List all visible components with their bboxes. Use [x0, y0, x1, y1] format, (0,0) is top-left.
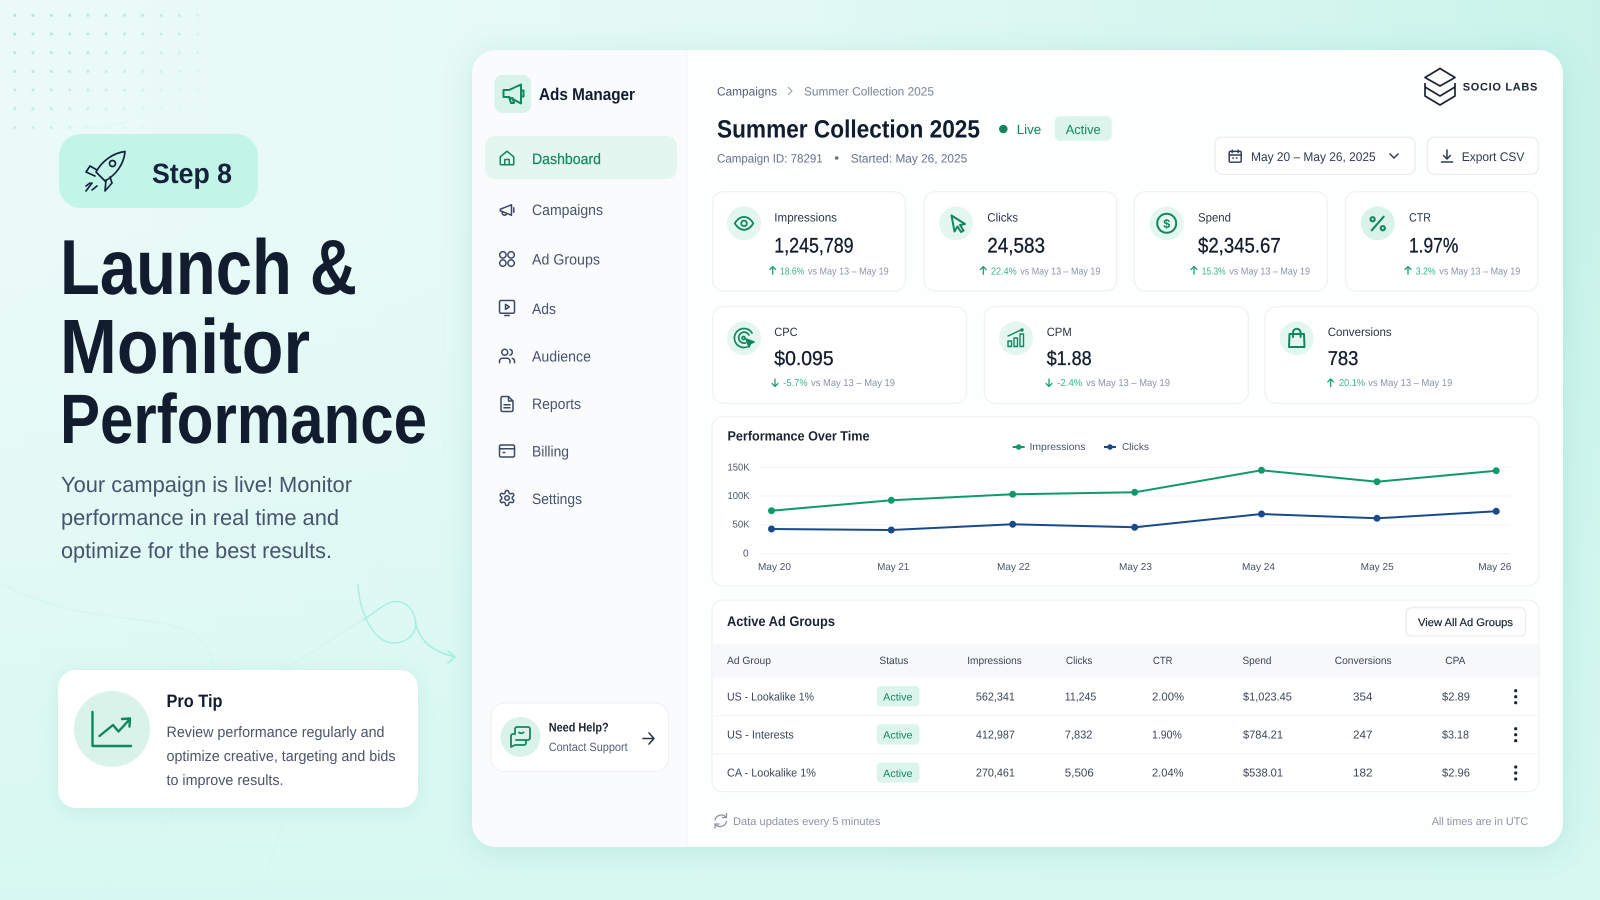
- step badge: [59, 134, 258, 208]
- row: us lookalike: 562,341: [976, 692, 1015, 704]
- help card: Contact Support: [549, 740, 628, 754]
- table header row: Conversions: [1335, 655, 1392, 667]
- nav: billing: Billing: [532, 444, 569, 460]
- table header row: [713, 644, 1538, 678]
- kpi: cpm: CPM: [1047, 325, 1072, 339]
- y axis labels: [728, 462, 750, 560]
- intro paragraph: performance in real time and: [61, 505, 339, 530]
- y axis labels: 150K: [728, 462, 750, 473]
- kpi: cpc: $0.095: [774, 348, 834, 370]
- row: ca lookalike: 2.04%: [1152, 768, 1184, 780]
- kpi: spend: $: [1163, 217, 1170, 231]
- table header row: CPA: [1445, 655, 1465, 667]
- icon: rising chart: [92, 712, 131, 746]
- kpi: conversions: [1265, 307, 1538, 403]
- pro tip text: Review performance regularly and: [166, 724, 384, 741]
- export button: Export CSV: [1462, 150, 1525, 164]
- row: us lookalike: 2.00%: [1152, 692, 1184, 704]
- line: impressions: [768, 467, 1500, 514]
- kpi: ctr: vs May 13 – May 19: [1439, 266, 1521, 277]
- row: us interests: 247: [1353, 730, 1372, 742]
- nav: ads: Ads: [532, 301, 556, 318]
- icon: decorative swirl arrow: [358, 585, 455, 663]
- icon: arrow: [643, 733, 654, 744]
- breadcrumb: Campaigns: [717, 84, 777, 98]
- icon: chat bubbles: [511, 727, 530, 747]
- row: us lookalike: 11,245: [1065, 692, 1096, 704]
- nav: campaigns: Campaigns: [532, 202, 603, 219]
- icon: megaphone logo: [504, 84, 524, 104]
- kpi: ctr: 1.97%: [1409, 234, 1458, 257]
- help card: Need Help?: [549, 721, 609, 735]
- x axis labels: [758, 562, 1512, 573]
- kpi: cpc: -5.7%: [783, 378, 808, 389]
- chart legend: Impressions: [1030, 442, 1086, 453]
- footer notes: [715, 814, 1528, 828]
- breadcrumb: Summer Collection 2025: [804, 84, 934, 98]
- campaign header: [717, 115, 1112, 165]
- row: us interests: 1.90%: [1152, 730, 1182, 742]
- pro tip heading: Pro Tip: [166, 691, 222, 711]
- intro paragraph: optimize for the best results.: [61, 538, 332, 563]
- y axis labels: 50K: [732, 520, 750, 531]
- view all button: View All Ad Groups: [1418, 617, 1513, 629]
- chart legend: Clicks: [1122, 442, 1149, 453]
- breadcrumb: [717, 84, 934, 98]
- intro paragraph: [61, 472, 352, 563]
- row: us interests: 7,832: [1065, 730, 1092, 742]
- title: Launch &: [60, 223, 357, 311]
- campaign header: Active: [1066, 122, 1101, 137]
- row: us interests: [727, 724, 1517, 745]
- x axis labels: May 22: [997, 562, 1030, 573]
- kpi: cpm: -2.4%: [1057, 378, 1082, 389]
- kpi: impressions: Impressions: [774, 211, 837, 225]
- row: ca lookalike: Active: [883, 768, 913, 780]
- campaign header: Live: [1017, 122, 1041, 137]
- footer notes: Data updates every 5 minutes: [733, 816, 881, 828]
- kpi: conversions: Conversions: [1328, 325, 1392, 339]
- row: ca lookalike: 182: [1353, 768, 1372, 780]
- campaign header: Campaign ID: 78291: [717, 151, 823, 165]
- nav: audience: [500, 348, 591, 366]
- chart legend: [1013, 442, 1149, 453]
- row: us lookalike: $1,023.45: [1243, 692, 1292, 704]
- kpi: clicks: 22.4%: [991, 266, 1017, 277]
- kpi: conversions: 783: [1328, 348, 1358, 370]
- nav: reports: [501, 396, 581, 413]
- table header row: Clicks: [1066, 655, 1092, 667]
- row: us interests: US - Interests: [727, 730, 794, 742]
- kpi: impressions: vs May 13 – May 19: [808, 266, 889, 277]
- x axis labels: May 21: [877, 562, 910, 573]
- kpi: ctr: CTR: [1409, 211, 1431, 225]
- campaign header: Started: May 26, 2025: [851, 151, 968, 165]
- date range button: May 20 – May 26, 2025: [1251, 150, 1376, 164]
- row: us interests: $3.18: [1442, 730, 1469, 742]
- help card: [491, 703, 668, 772]
- nav: ads: [500, 300, 556, 318]
- kpi: spend: [1134, 192, 1327, 291]
- export button: [1427, 137, 1538, 174]
- row: ca lookalike: 270,461: [976, 768, 1015, 780]
- x axis labels: May 23: [1119, 562, 1152, 573]
- y axis labels: 100K: [728, 491, 750, 502]
- x axis labels: May 24: [1242, 562, 1275, 573]
- kpi: cpm: [984, 307, 1248, 403]
- row: us interests: Active: [883, 730, 913, 742]
- title: [60, 223, 427, 458]
- line: clicks: [768, 508, 1500, 534]
- pro tip text: [166, 724, 396, 789]
- panel: sidebar: [472, 50, 687, 847]
- table header row: Status: [879, 655, 908, 667]
- panel: dashboard window: [472, 50, 1563, 847]
- row: us lookalike: 354: [1353, 692, 1373, 704]
- kpi: spend: $2,345.67: [1198, 234, 1281, 257]
- kpi: ctr: [1345, 192, 1538, 291]
- row: us interests: 412,987: [976, 730, 1015, 742]
- row: ca lookalike: [727, 762, 1517, 783]
- table header row: CTR: [1153, 655, 1173, 667]
- brand logo: socio labs: SOCIO LABS: [1463, 82, 1537, 94]
- row: us lookalike: US - Lookalike 1%: [727, 692, 814, 704]
- kpi: spend: 15.3%: [1202, 266, 1226, 277]
- footer notes: All times are in UTC: [1432, 816, 1528, 828]
- table header row: Spend: [1242, 655, 1272, 667]
- table heading: Active Ad Groups: [727, 613, 835, 629]
- step label: Step 8: [152, 158, 232, 189]
- kpi: clicks: Clicks: [987, 211, 1018, 225]
- nav: campaigns: [500, 202, 603, 219]
- panel: active ad groups table: [712, 600, 1539, 792]
- title: Performance: [60, 380, 427, 458]
- kpi: impressions: 1,245,789: [774, 234, 854, 257]
- kpi: conversions: vs May 13 – May 19: [1368, 378, 1453, 389]
- kpi: cpc: [713, 307, 967, 403]
- panel: performance chart: [712, 417, 1539, 586]
- icon: rocket: [86, 152, 125, 191]
- nav: settings: Settings: [532, 491, 582, 508]
- kpi: spend: vs May 13 – May 19: [1229, 266, 1310, 277]
- panel: pro tip: [58, 670, 418, 808]
- nav: ad groups: Ad Groups: [532, 252, 600, 268]
- row: ca lookalike: $538.01: [1243, 768, 1283, 780]
- pro tip text: optimize creative, targeting and bids: [166, 748, 396, 765]
- row: ca lookalike: $2.96: [1442, 768, 1470, 780]
- chart heading: Performance Over Time: [728, 429, 870, 444]
- kpi: cpc: CPC: [774, 325, 798, 339]
- x axis labels: May 26: [1478, 562, 1512, 573]
- kpi: cpc: vs May 13 – May 19: [811, 378, 895, 389]
- nav: billing: [500, 444, 569, 460]
- kpi: ctr: 3.2%: [1416, 266, 1436, 277]
- nav: active dashboard: Dashboard: [532, 151, 601, 168]
- y axis labels: 0: [743, 549, 749, 560]
- nav: active dashboard: [485, 136, 677, 179]
- campaign header: Summer Collection 2025: [717, 115, 980, 143]
- app name: Ads Manager: [539, 85, 635, 104]
- table header row: Impressions: [967, 655, 1022, 667]
- x axis labels: May 25: [1361, 562, 1394, 573]
- kpi: impressions: [713, 192, 905, 291]
- brand logo: socio labs: [1425, 68, 1537, 105]
- kpi: conversions: 20.1%: [1339, 378, 1365, 389]
- kpi: clicks: [924, 192, 1117, 291]
- x axis labels: May 20: [758, 562, 791, 573]
- kpi: clicks: vs May 13 – May 19: [1020, 266, 1101, 277]
- app logo tile: [494, 75, 531, 113]
- row: us lookalike: [727, 686, 1517, 706]
- row: us lookalike: Active: [883, 691, 913, 703]
- row: ca lookalike: 5,506: [1065, 768, 1094, 780]
- kpi: impressions: 18.6%: [780, 266, 804, 277]
- table header row: Ad Group: [727, 655, 771, 667]
- kpi: cpm: $1.88: [1047, 348, 1092, 370]
- row: us lookalike: $2.89: [1442, 692, 1470, 704]
- row: us interests: $784.21: [1243, 730, 1283, 742]
- intro paragraph: Your campaign is live! Monitor: [61, 472, 352, 497]
- date range button: [1215, 137, 1415, 174]
- nav: ad groups: [500, 252, 600, 268]
- nav: audience: Audience: [532, 348, 591, 366]
- kpi: spend: Spend: [1198, 211, 1231, 225]
- kpi: cpm: vs May 13 – May 19: [1086, 378, 1170, 389]
- nav: reports: Reports: [532, 396, 581, 413]
- kpi: clicks: 24,583: [987, 234, 1045, 257]
- view all button: [1406, 608, 1526, 636]
- nav: settings: [500, 490, 582, 508]
- title: Monitor: [60, 304, 310, 390]
- row: ca lookalike: CA - Lookalike 1%: [727, 768, 816, 780]
- pro tip text: to improve results.: [166, 772, 284, 789]
